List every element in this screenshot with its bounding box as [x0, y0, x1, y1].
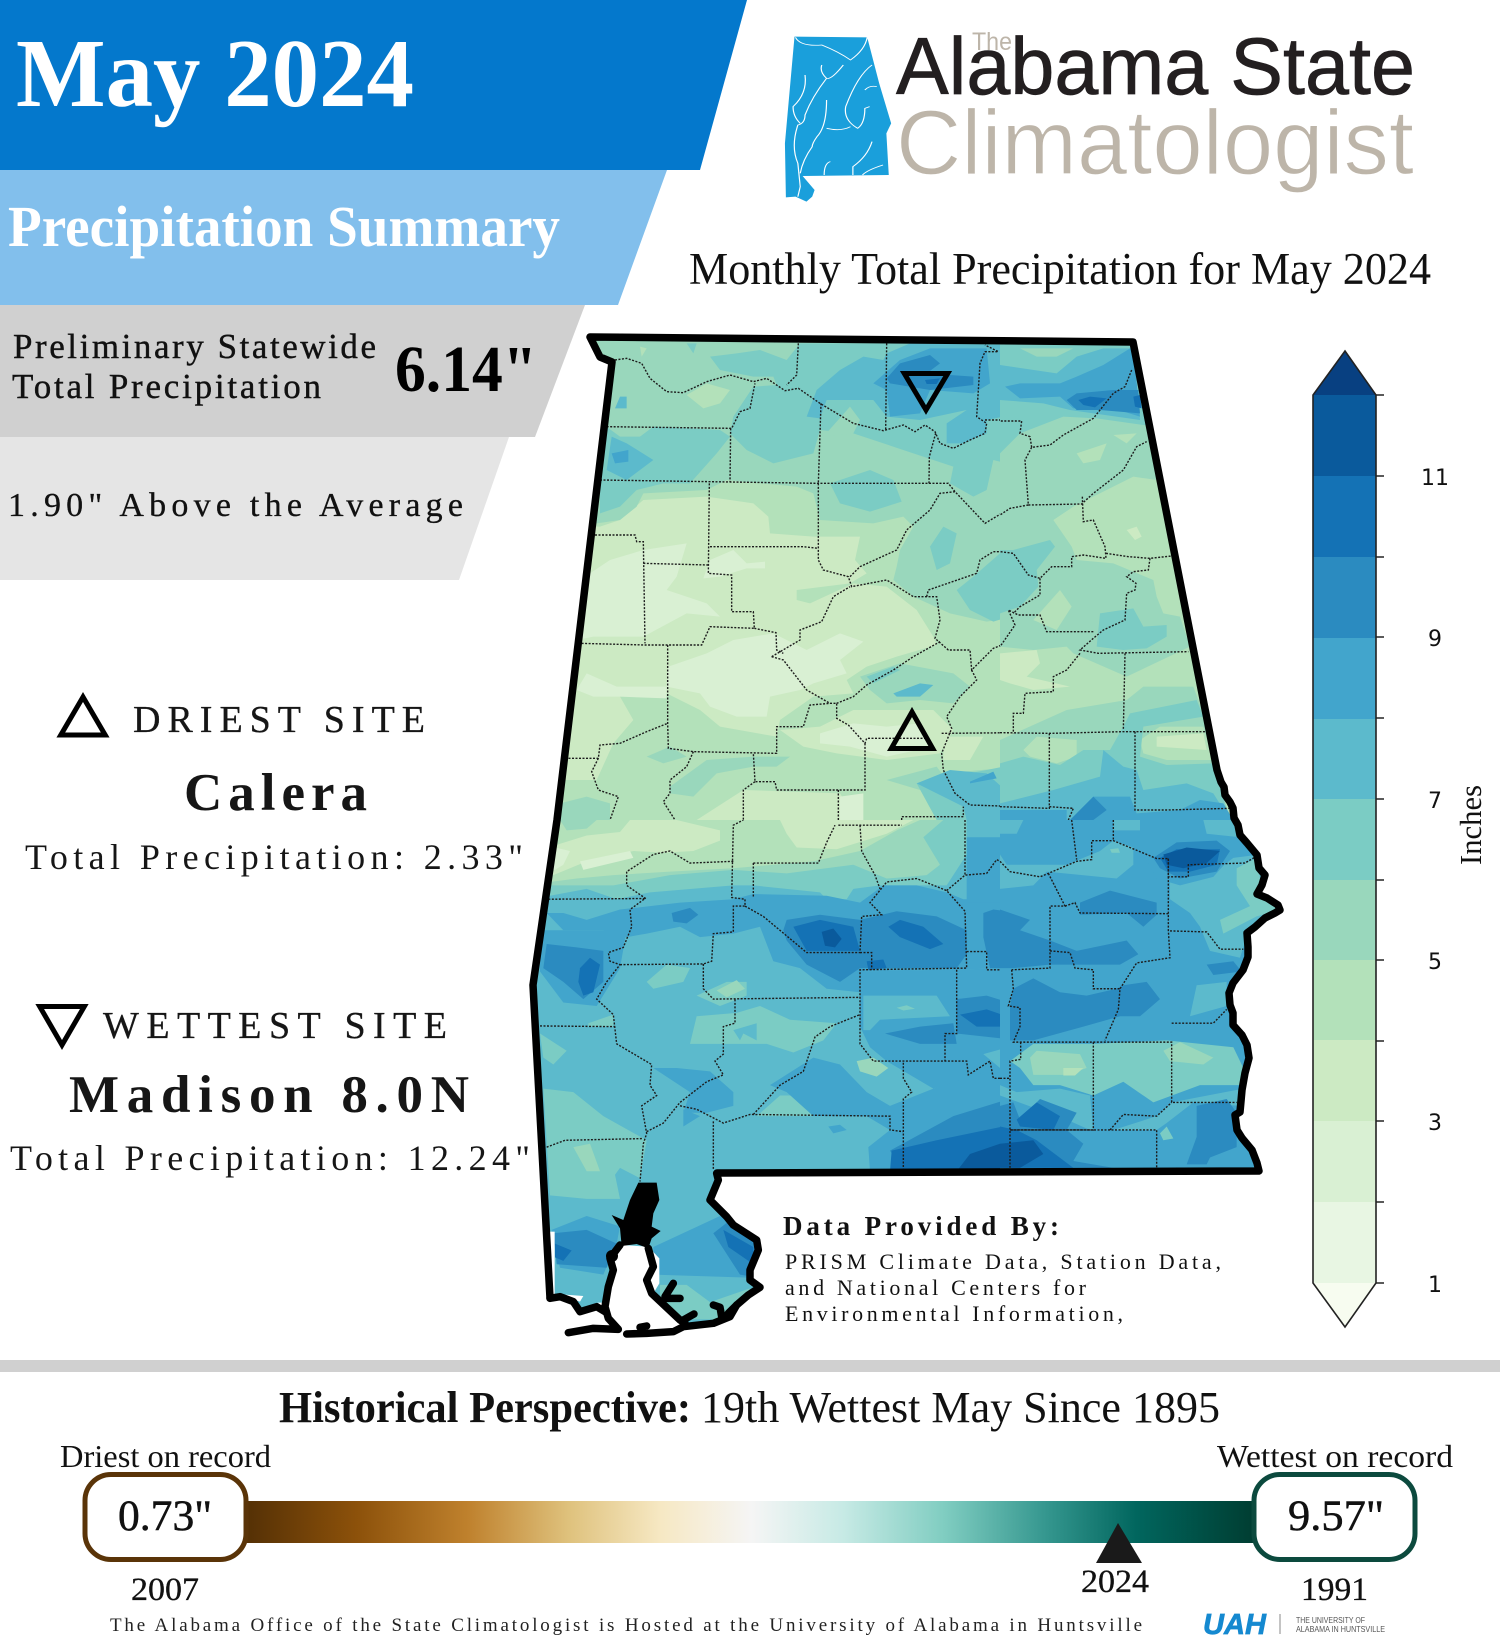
panel: statewide total	[0, 305, 585, 437]
map: Alabama monthly precipitation	[520, 320, 1300, 1360]
wettest record: Wettest on record	[1217, 1438, 1453, 1474]
historical perspective heading: 19th Wettest May Since 1895	[701, 1383, 1220, 1432]
driest record: 2007	[131, 1572, 199, 1608]
panel: wettest site: Madison 8.0N	[69, 1066, 469, 1124]
logo: Alabama State Climatologist: Climatologist	[896, 92, 1414, 194]
icon: driest triangle	[61, 697, 105, 735]
colorbar legend: 3	[1428, 1111, 1442, 1136]
2024 marker: 2024	[1081, 1564, 1149, 1600]
colorbar legend: 1	[1428, 1273, 1442, 1298]
colorbar legend: 11	[1421, 466, 1449, 491]
logo: UAH	[1203, 1609, 1385, 1641]
panel: departure from average: 1.90" Above the Average	[8, 487, 463, 524]
logo: UAH: ALABAMA IN HUNTSVILLE	[1296, 1625, 1385, 1634]
Gulf coast and Mobile Bay outline	[546, 1170, 764, 1338]
divider bar	[0, 1360, 1500, 1372]
colorbar legend	[1313, 351, 1488, 1327]
panel: statewide total: Total Precipitation	[12, 367, 321, 406]
marker: wettest site	[904, 374, 948, 410]
marker: driest site	[891, 712, 933, 748]
panel: wettest site	[10, 1005, 530, 1178]
record scale	[60, 1438, 1453, 1608]
panel: wettest site: WETTEST SITE	[103, 1005, 447, 1047]
wettest record: 1991	[1301, 1572, 1368, 1608]
text: data provided by: and National Centers for	[785, 1275, 1087, 1300]
driest record: Driest on record	[60, 1438, 271, 1474]
text: data provided by: PRISM Climate Data, Station Data,	[785, 1249, 1221, 1274]
map title: Monthly Total Precipitation for May 2024	[689, 244, 1431, 294]
panel: driest site	[25, 697, 523, 877]
state outline	[533, 337, 1280, 1298]
wettest record	[1217, 1438, 1453, 1608]
Mobile Bay and coastal cut-outs	[550, 1232, 680, 1332]
logo: UAH: UAH	[1203, 1609, 1267, 1641]
driest record: 0.73"	[118, 1493, 212, 1540]
colorbar legend: Inches	[1453, 785, 1488, 865]
historical perspective heading: Historical Perspective:	[279, 1383, 691, 1432]
panel: driest site: Calera	[184, 764, 367, 822]
icon: Alabama state with rivers	[785, 37, 891, 202]
colorbar legend: 9	[1428, 627, 1442, 652]
logo: UAH: THE UNIVERSITY OF	[1296, 1616, 1365, 1625]
gradient bar	[245, 1501, 1258, 1543]
historical perspective heading	[279, 1383, 1220, 1432]
text: data provided by: Environmental Information,	[785, 1301, 1123, 1326]
banner: Precipitation Summary	[0, 170, 667, 305]
panel: driest site: DRIEST SITE	[133, 699, 425, 741]
2024 marker	[1081, 1523, 1149, 1600]
driest record	[60, 1438, 271, 1608]
colorbar legend: 7	[1428, 789, 1442, 814]
panel: driest site: Total Precipitation: 2.33"	[25, 837, 523, 877]
panel: statewide total: 6.14"	[395, 333, 537, 406]
wettest record: 9.57"	[1288, 1493, 1384, 1540]
logo: Alabama State Climatologist	[785, 22, 1415, 202]
panel: statewide total: Preliminary Statewide	[13, 327, 376, 366]
icon: wettest triangle	[40, 1006, 84, 1045]
colorbar legend: 5	[1428, 950, 1442, 975]
banner: May 2024	[0, 0, 747, 170]
banner: Precipitation Summary: Precipitation Summary	[8, 194, 560, 259]
logo: Alabama State Climatologist: Alabama State	[896, 22, 1415, 112]
banner: May 2024: May 2024	[16, 20, 414, 128]
text: data provided by: Data Provided By:	[783, 1211, 1059, 1241]
logo: Alabama State Climatologist: The	[972, 28, 1012, 56]
text: data provided by	[783, 1211, 1221, 1326]
contour fills and county lines	[536, 340, 1276, 1322]
panel: wettest site: Total Precipitation: 12.24"	[10, 1138, 530, 1178]
footer text: The Alabama Office of the State Climatologist is Hosted at the University of Alabama in Huntsville	[110, 1615, 1142, 1636]
panel: departure from average	[0, 437, 509, 580]
